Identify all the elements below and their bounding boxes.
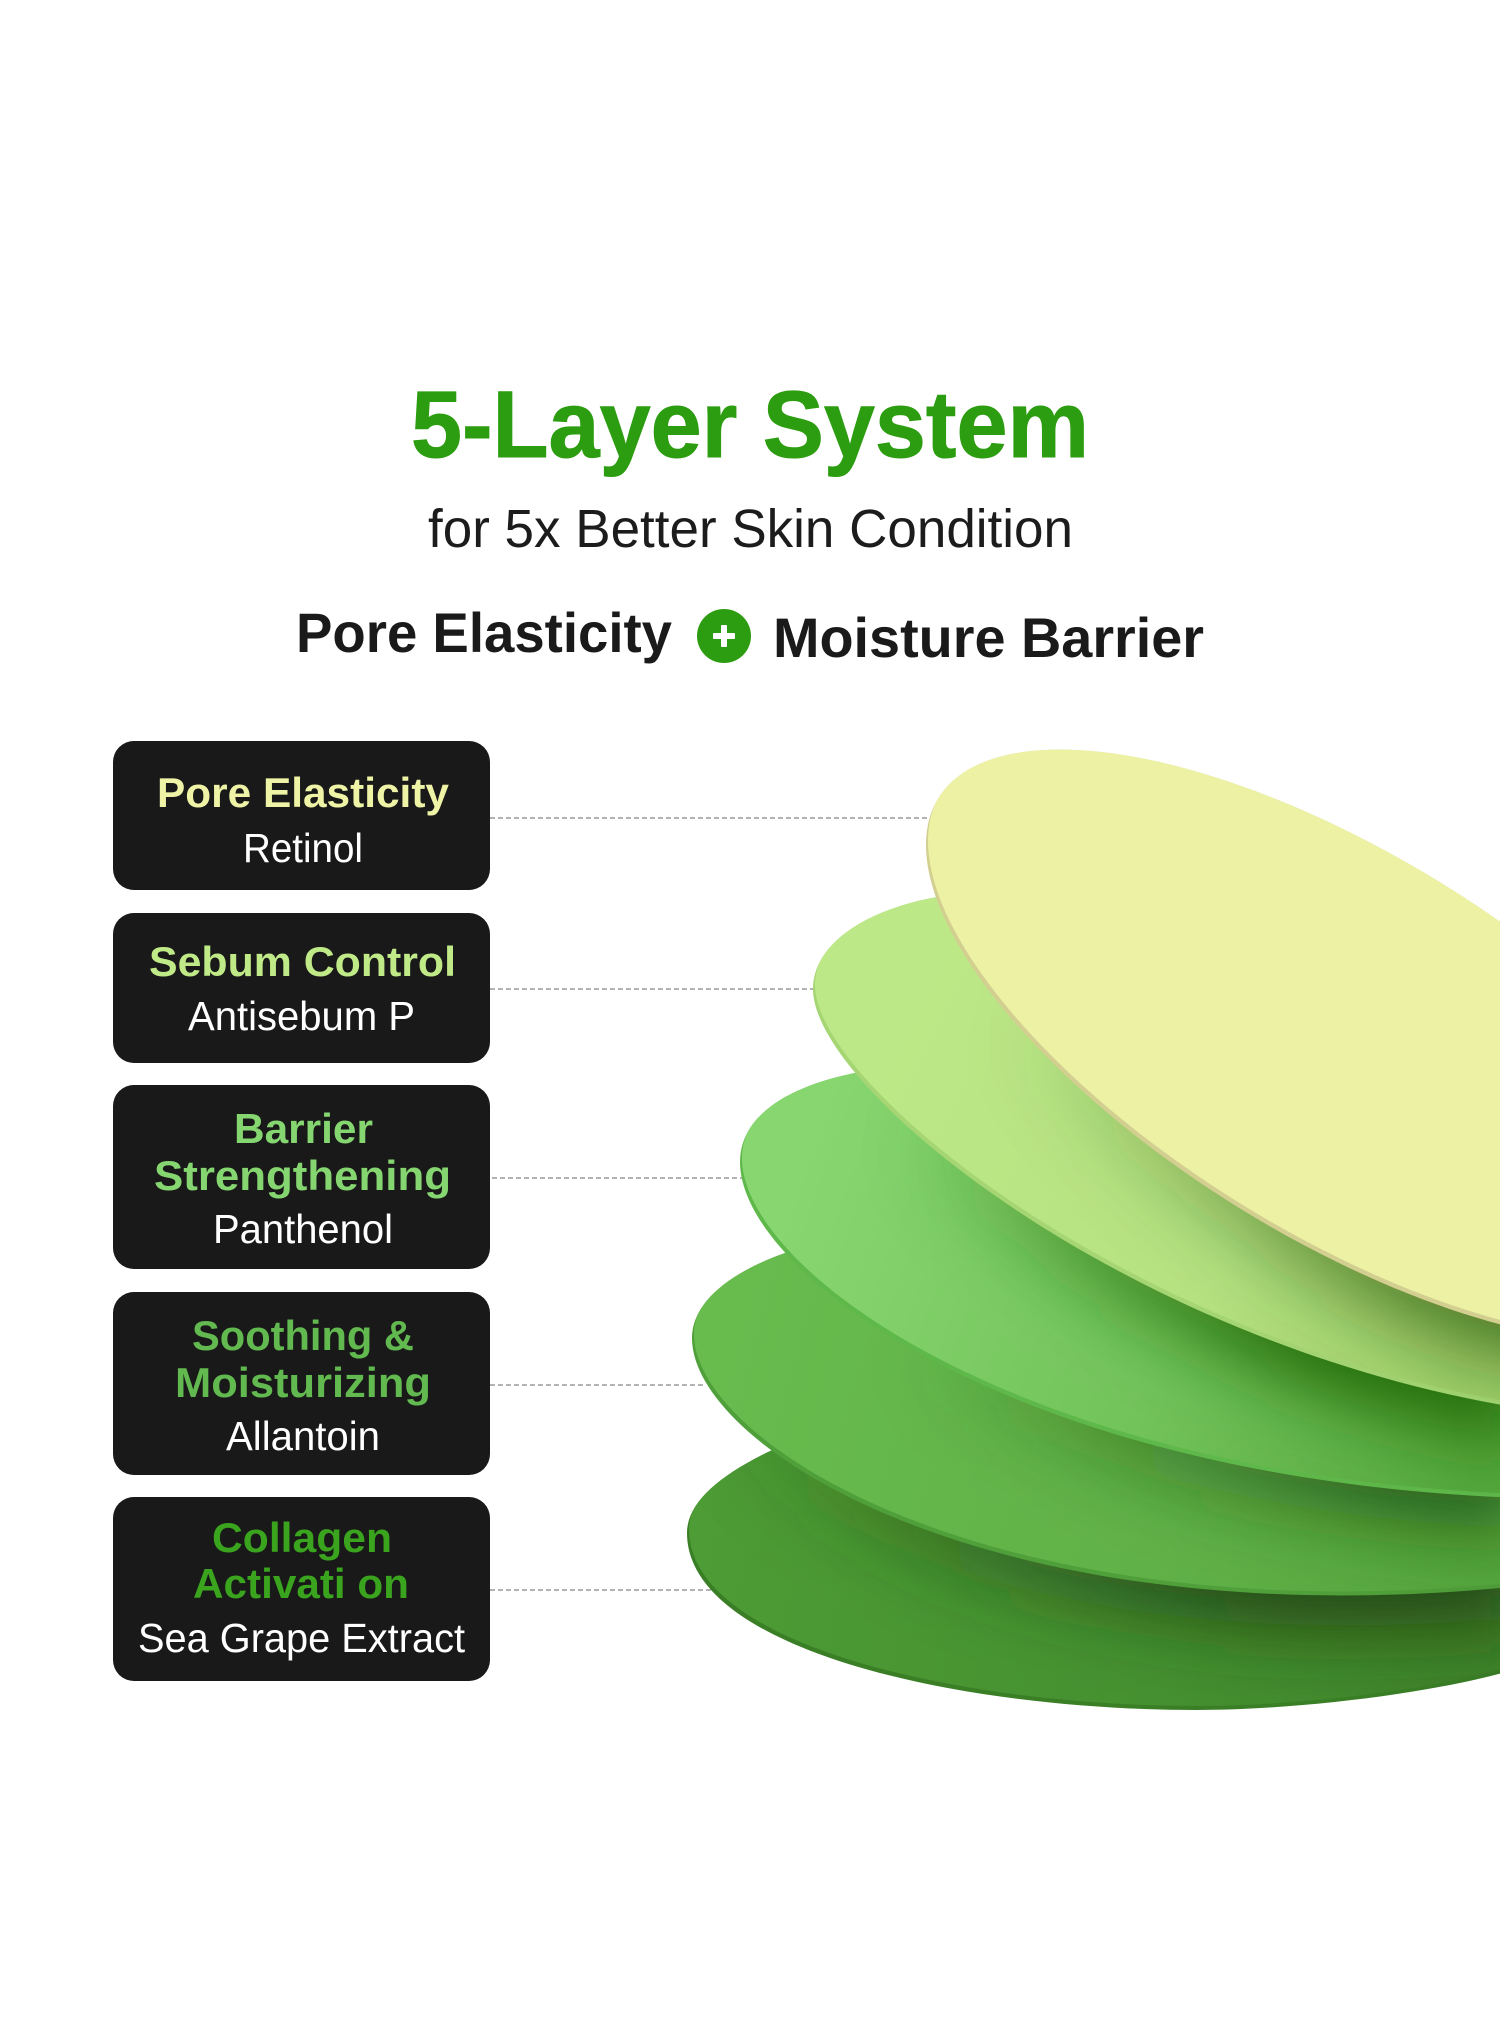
connector: soothing and moisturizing (490, 1384, 705, 1386)
label: pore elasticity: Pore Elasticity (157, 769, 450, 816)
layer 1: pale yellow disc (926, 746, 1500, 1342)
label: barrier strengthening: Strengthening (154, 1152, 451, 1199)
layer 4: medium green disc (692, 1252, 1500, 1596)
icon: plus badge (697, 609, 751, 663)
connector: pore elasticity (490, 817, 930, 819)
label: soothing and moisturizing: Moisturizing (175, 1359, 431, 1406)
panel: barrier strengthening (113, 1085, 490, 1269)
ingredient: allantoin: Allantoin (226, 1413, 380, 1459)
benefit: pore elasticity: Pore Elasticity (296, 601, 672, 664)
panel: sebum control (113, 913, 490, 1063)
layer 2: light green disc (813, 897, 1500, 1405)
label: barrier strengthening: Barrier (234, 1105, 373, 1152)
subtitle: for 5x Better Skin Condition (428, 499, 1073, 559)
ingredient: sea grape extract: Sea Grape Extract (138, 1615, 466, 1661)
connector: barrier strengthening (492, 1177, 745, 1179)
ingredient: retinol: Retinol (243, 825, 363, 871)
connector: sebum control (490, 988, 816, 990)
label: soothing and moisturizing: Soothing & (192, 1312, 414, 1359)
panel: soothing and moisturizing (113, 1292, 490, 1475)
label: collagen activation: Collagen (212, 1514, 392, 1561)
ingredient: panthenol: Panthenol (213, 1206, 393, 1252)
title: 5-Layer System (411, 372, 1089, 478)
panel: pore elasticity (113, 741, 490, 890)
layer 5: dark green disc (687, 1450, 1500, 1710)
ingredient: antisebum p: Antisebum P (188, 993, 415, 1039)
label: collagen activation: Activati on (193, 1560, 409, 1607)
panel: collagen activation (113, 1497, 490, 1681)
layer 3: green disc (740, 1072, 1500, 1498)
connector: collagen activation (490, 1589, 715, 1591)
label: sebum control: Sebum Control (149, 938, 456, 985)
benefit: moisture barrier: Moisture Barrier (773, 606, 1204, 669)
